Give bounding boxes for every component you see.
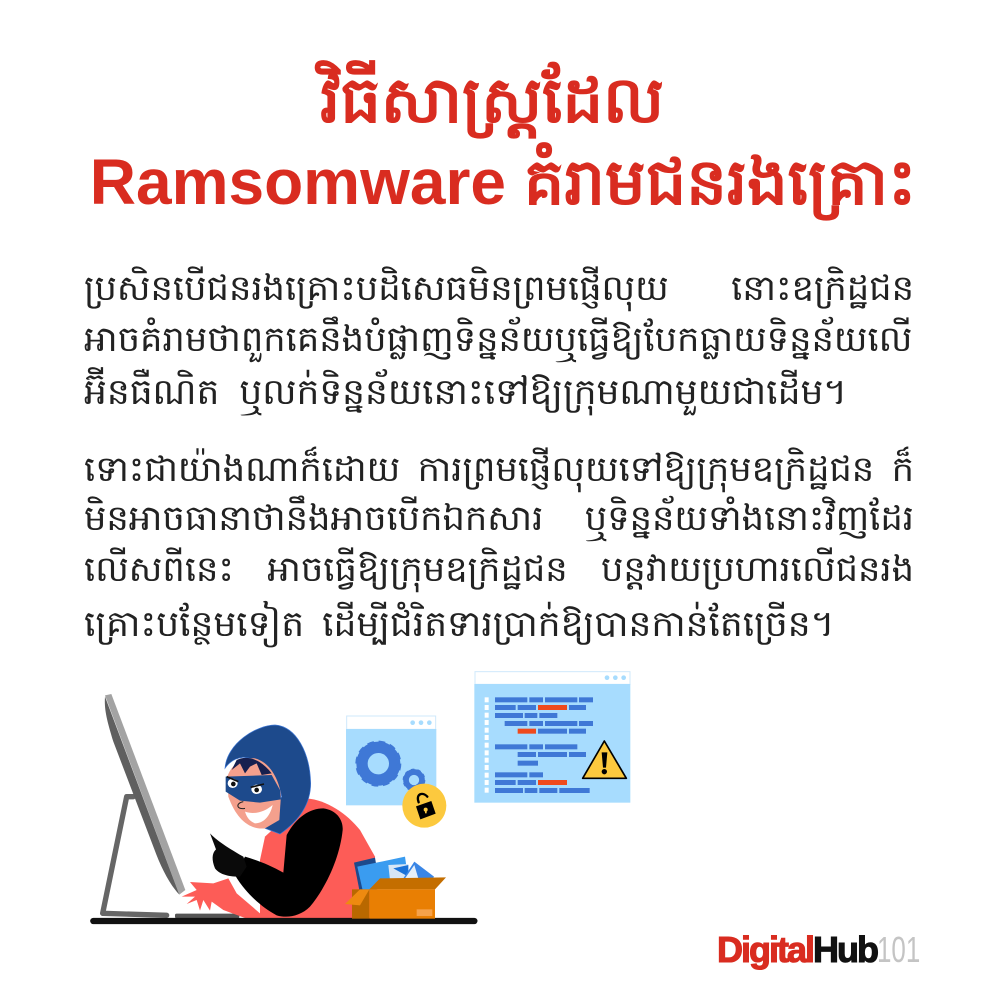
monitor stand <box>103 797 167 915</box>
text block: paragraph 2 <box>84 446 914 648</box>
code lines <box>495 697 593 793</box>
face <box>227 758 281 829</box>
text block: paragraph 1: ប្រសិនបើជនរងគ្រោះបដិសេធមិនព្រមផ្ញើលុយ នោះឧក្រិដ្ឋជន <box>84 269 914 308</box>
logo: DigitalHub101: 101 <box>877 929 920 970</box>
logo: DigitalHub101: DigitalHub <box>717 929 877 970</box>
text block: paragraph 1: អាចគំរាមថាពួកគេនឹងបំផ្លាញទិន្នន័យឬធ្វើឱ្យបែកធ្លាយទិន្នន័យលើ <box>84 320 912 359</box>
mask <box>226 775 281 803</box>
hand <box>182 878 283 919</box>
text block: paragraph 2: ទោះជាយ៉ាងណាក៏ដោយ ការព្រមផ្ញើលុយទៅឱ្យក្រុមឧក្រិដ្ឋជន ក៏ <box>84 450 914 489</box>
title: Ramsomware គំរាមជនរងគ្រោះ <box>90 146 916 218</box>
text block: paragraph 1: អ៊ីនធឺណិត ឬលក់ទិន្នន័យនោះទៅឱ្យក្រុមណាមួយជាដើម។ <box>84 371 847 412</box>
eyes <box>228 779 238 788</box>
icon: open padlock <box>402 784 446 828</box>
hood <box>225 725 311 834</box>
mouth <box>245 805 273 823</box>
black arm <box>235 808 343 917</box>
text block: paragraph 2: លើសពីនេះ អាចធ្វើឱ្យក្រុមឧក្រិដ្ឋជន បន្តវាយប្រហារលើជនរង <box>84 550 914 589</box>
window: gears <box>346 716 446 828</box>
icon: warning triangle <box>583 741 626 778</box>
pointing hand <box>210 833 247 877</box>
cardboard box <box>345 877 446 919</box>
desk line <box>93 911 474 930</box>
title <box>90 60 916 221</box>
folders <box>354 857 434 893</box>
illustration: hacker at computer <box>93 694 474 921</box>
text block: paragraph 2: គ្រោះបន្ថែមទៀត ដើម្បីជំរិតទារប្រាក់ឱ្យបានកាន់តែច្រើន។ <box>84 603 834 644</box>
body: red shirt <box>260 798 375 919</box>
monitor <box>105 694 185 895</box>
line numbers <box>485 697 489 793</box>
text block: paragraph 2: មិនអាចធានាថានឹងអាចបើកឯកសារ ឬទិន្នន័យទាំងនោះវិញដែរ <box>84 499 914 538</box>
icon: gears <box>358 743 424 790</box>
keyboard <box>175 914 239 918</box>
window: code with warning <box>474 672 630 803</box>
title: វិធីសាស្រ្តដែល <box>320 64 664 136</box>
hair <box>232 758 272 775</box>
highlighted code <box>518 705 567 785</box>
text block: paragraph 1 <box>84 266 914 416</box>
